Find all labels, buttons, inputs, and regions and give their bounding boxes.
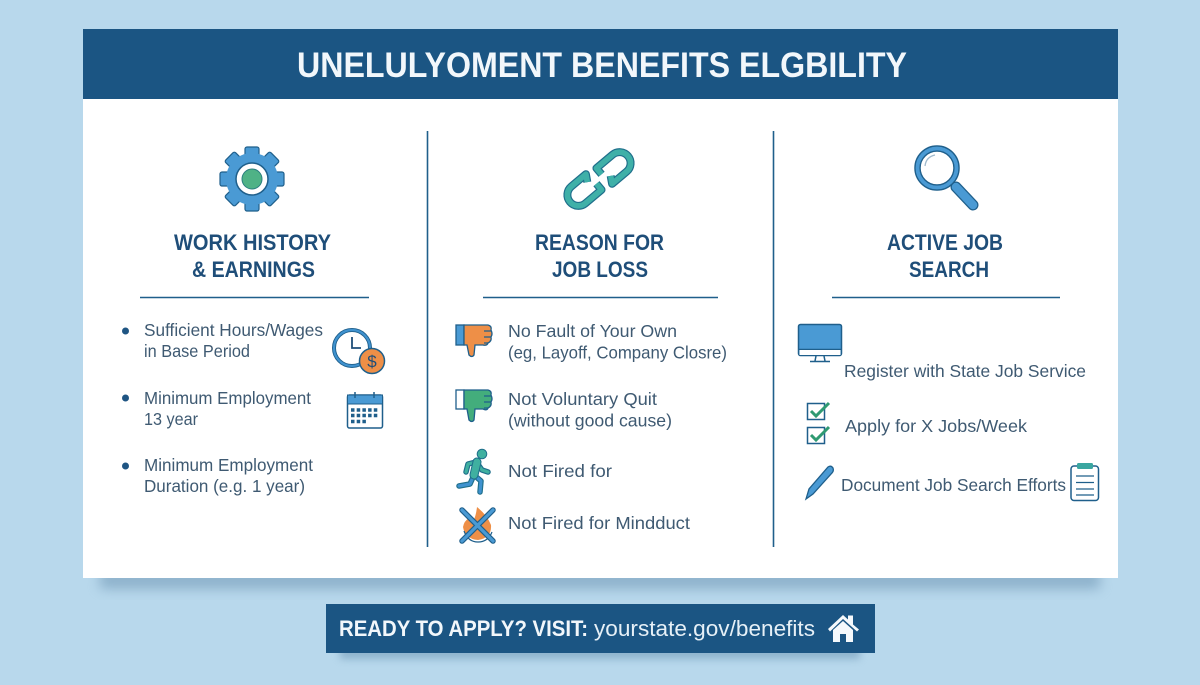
icon: running person <box>459 449 488 492</box>
item: apply for jobs: Apply for X Jobs/Week <box>845 416 1027 436</box>
item: no fault: (eg, Layoff, Company Closre) <box>508 342 727 362</box>
call to action banner: READY TO APPLY? VISIT: <box>339 616 588 641</box>
heading: work history: WORK HISTORY <box>174 230 331 255</box>
heading: reason for job loss: JOB LOSS <box>552 257 648 282</box>
panel: main card <box>83 29 1118 578</box>
icon: clock and dollar coin <box>334 330 384 374</box>
list item: sufficient hours: Sufficient Hours/Wages <box>144 320 323 340</box>
title: UNELULYOMENT BENEFITS ELGBILITY <box>297 46 907 85</box>
icon: crossed out flame <box>462 507 493 542</box>
icon: pen <box>806 466 833 499</box>
item: not voluntary quit: Not Voluntary Quit <box>508 389 657 409</box>
icon: gear <box>220 147 284 211</box>
panel: work history and earnings <box>122 147 384 496</box>
heading: active job search: SEARCH <box>909 257 989 282</box>
heading: active job search <box>887 230 1003 282</box>
item: not fired for: Not Fired for <box>508 461 612 481</box>
icon: magnifying glass <box>918 148 973 205</box>
icon: calendar <box>348 392 382 428</box>
item: no fault: No Fault of Your Own <box>508 321 677 341</box>
call to action banner <box>326 604 875 653</box>
list item: minimum employment duration: Duration (e.g. 1 year) <box>144 476 305 496</box>
heading: active job search: ACTIVE JOB <box>887 230 1003 255</box>
item: document search: Document Job Search Efforts <box>841 475 1066 495</box>
icon: computer monitor <box>798 324 842 362</box>
heading: work history <box>174 230 331 282</box>
header banner <box>83 29 1118 99</box>
icon: house <box>828 615 859 642</box>
icon: clipboard <box>1071 463 1098 500</box>
item: not voluntary quit: (without good cause) <box>508 410 672 430</box>
panel: reason for job loss <box>456 148 727 542</box>
list item: sufficient hours <box>122 320 323 361</box>
list item: minimum employment duration <box>122 455 313 496</box>
heading: reason for job loss: REASON FOR <box>535 230 664 255</box>
heading: work history: & EARNINGS <box>192 257 315 282</box>
panel: active job search <box>798 148 1098 500</box>
icon: orange thumbs down <box>456 325 492 356</box>
icon: checkboxes <box>808 403 829 444</box>
item: register: Register with State Job Service <box>844 361 1086 381</box>
call to action banner: yourstate.gov/benefits <box>594 616 815 641</box>
icon: clock and dollar coin: $ <box>367 352 377 371</box>
icon: broken chain <box>563 148 635 210</box>
list item: minimum employment 13 year: Minimum Employment <box>144 388 311 408</box>
item: not fired for misconduct: Not Fired for Mindduct <box>508 513 690 533</box>
list item: minimum employment 13 year <box>122 388 311 429</box>
item: no fault <box>508 321 727 362</box>
icon: green thumbs down <box>456 390 492 422</box>
list item: minimum employment 13 year: 13 year <box>144 409 198 429</box>
item: not voluntary quit <box>508 389 672 430</box>
list item: sufficient hours: in Base Period <box>144 341 250 361</box>
heading: reason for job loss <box>535 230 664 282</box>
list item: minimum employment duration: Minimum Employment <box>144 455 313 475</box>
